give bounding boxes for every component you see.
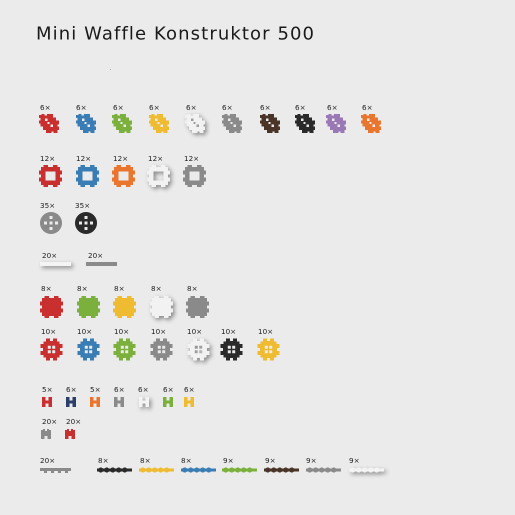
- row: diagonal waffle pieces: 6×: [295, 103, 306, 112]
- row: H connectors: 6×: [66, 385, 77, 394]
- row: diagonal waffle pieces: [39, 103, 381, 133]
- row: flat bars: 20×: [42, 251, 57, 260]
- row: round grid waffles: 10×: [187, 327, 202, 336]
- row: frame waffle pieces: [39, 154, 206, 187]
- row: long chain pieces: 9×: [306, 456, 317, 465]
- row: solid square pieces: 8×: [187, 284, 198, 293]
- row: frame waffle pieces: 12×: [184, 154, 199, 163]
- row: long chain pieces: 20×: [40, 456, 55, 465]
- row: long chain pieces: 9×: [349, 456, 360, 465]
- row: frame waffle pieces: 12×: [76, 154, 91, 163]
- row: diagonal waffle pieces: 6×: [113, 103, 124, 112]
- row: long chain pieces: 8×: [140, 456, 151, 465]
- row: H connectors: [42, 385, 195, 407]
- row: H connectors: 5×: [42, 385, 53, 394]
- row: solid square pieces: 8×: [151, 284, 162, 293]
- title: Mini Waffle Konstruktor 500: [36, 24, 314, 44]
- row: H connectors: 6×: [114, 385, 125, 394]
- row: H connectors: 6×: [184, 385, 195, 394]
- row: long chain pieces: 9×: [265, 456, 276, 465]
- row: solid square pieces: 8×: [77, 284, 88, 293]
- row: round grid waffles: 10×: [41, 327, 56, 336]
- row: round grid waffles: 10×: [77, 327, 92, 336]
- row: arch connectors: 20×: [42, 417, 57, 426]
- row: diagonal waffle pieces: 6×: [260, 103, 271, 112]
- row: long chain pieces: 8×: [181, 456, 192, 465]
- row: solid square pieces: 8×: [114, 284, 125, 293]
- row: round grid waffles: 10×: [114, 327, 129, 336]
- row: diagonal waffle pieces: 6×: [327, 103, 338, 112]
- row: diagonal waffle pieces: 6×: [362, 103, 373, 112]
- row: arch connectors: [41, 417, 81, 439]
- row: round grid waffles: 10×: [221, 327, 236, 336]
- row: flat bars: 20×: [88, 251, 103, 260]
- row: flat bars: [40, 251, 117, 266]
- row: solid square pieces: [40, 284, 209, 318]
- row: frame waffle pieces: 12×: [40, 154, 55, 163]
- row: round discs: [40, 201, 97, 234]
- row: round grid waffles: 10×: [258, 327, 273, 336]
- row: round grid waffles: [40, 327, 280, 360]
- row: round discs: 35×: [75, 201, 90, 210]
- small speck: [110, 69, 111, 70]
- row: diagonal waffle pieces: 6×: [186, 103, 197, 112]
- row: long chain pieces: [40, 456, 384, 473]
- row: frame waffle pieces: 12×: [148, 154, 163, 163]
- row: round grid waffles: 10×: [151, 327, 166, 336]
- row: frame waffle pieces: 12×: [113, 154, 128, 163]
- row: diagonal waffle pieces: 6×: [222, 103, 233, 112]
- row: diagonal waffle pieces: 6×: [149, 103, 160, 112]
- row: diagonal waffle pieces: 6×: [76, 103, 87, 112]
- row: diagonal waffle pieces: 6×: [40, 103, 51, 112]
- row: long chain pieces: 8×: [98, 456, 109, 465]
- row: H connectors: 6×: [138, 385, 149, 394]
- row: solid square pieces: 8×: [41, 284, 52, 293]
- row: long chain pieces: 9×: [223, 456, 234, 465]
- row: H connectors: 5×: [90, 385, 101, 394]
- row: H connectors: 6×: [163, 385, 174, 394]
- row: round discs: 35×: [40, 201, 55, 210]
- row: arch connectors: 20×: [66, 417, 81, 426]
